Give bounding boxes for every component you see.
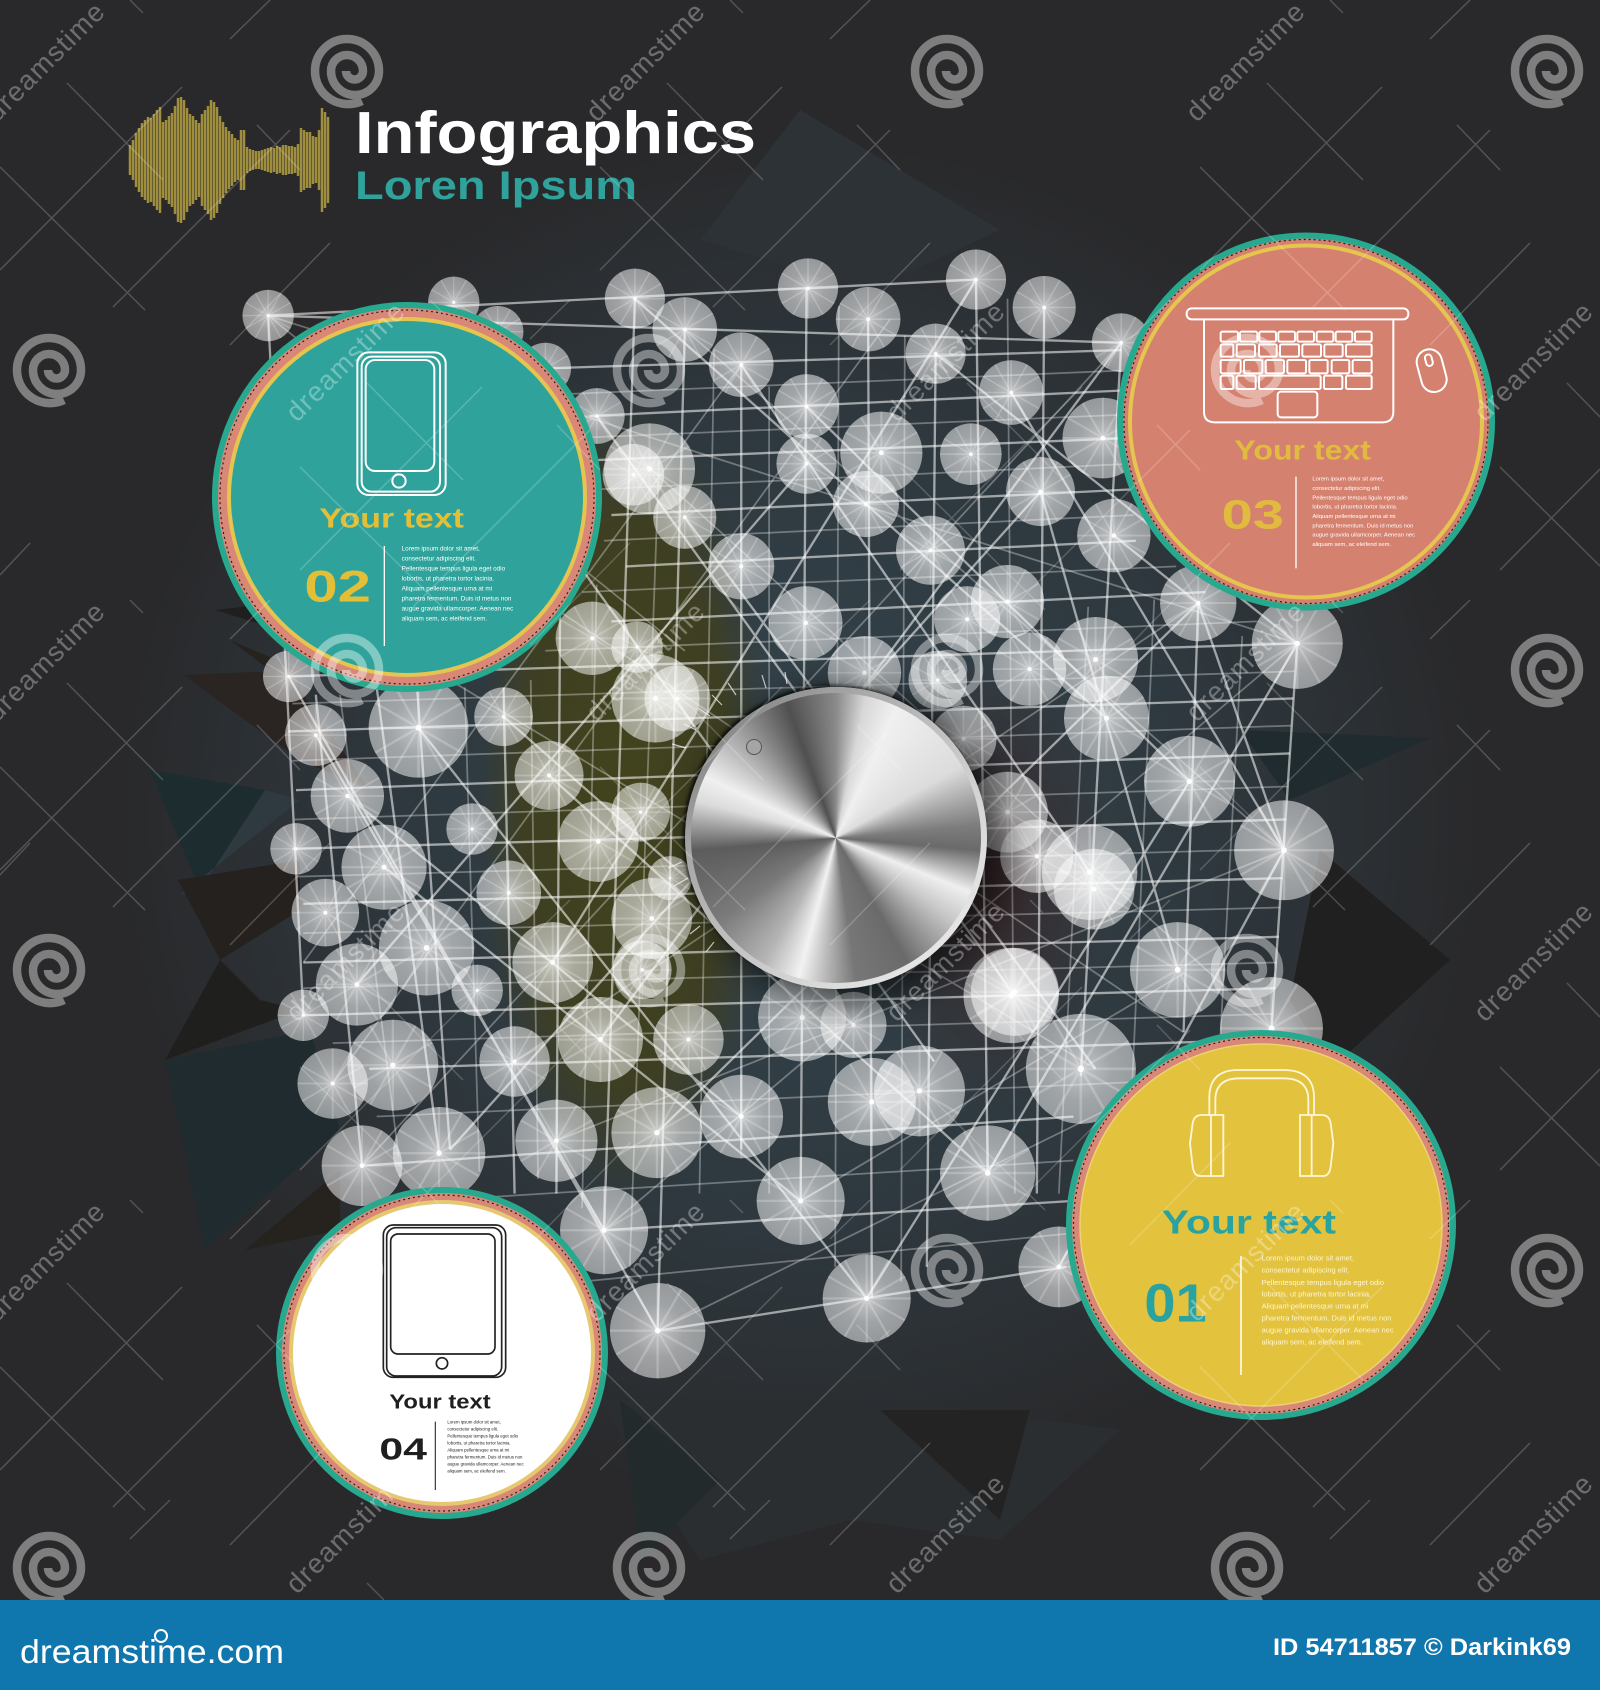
body text: pharetra fermentum. Duis id metus non	[402, 595, 512, 602]
body text: Aliquam pellentesque urna at mi	[447, 1448, 509, 1453]
body text	[402, 545, 513, 622]
watermark text: dreamstime	[879, 1467, 1011, 1599]
number: 04: 04	[379, 1432, 427, 1466]
audio waveform	[130, 97, 328, 223]
body text: pharetra fermentum. Duis id metus non	[1312, 523, 1413, 529]
watermark text: dreamstime	[279, 295, 411, 427]
knob tick marks	[668, 672, 787, 952]
body text	[447, 1420, 524, 1474]
panel: 04 white	[279, 1190, 605, 1516]
heading: your text: Your text	[389, 1391, 491, 1414]
watermark text: dreamstime	[1179, 1195, 1311, 1327]
body text: Lorem ipsum dolor sit amet,	[1262, 1254, 1354, 1263]
watermark text: dreamstime	[1467, 895, 1599, 1027]
body text	[1312, 477, 1415, 548]
metal dial knob	[685, 687, 987, 989]
body text: augue gravida ullamcorper. Aenean nec	[1312, 533, 1415, 539]
body text: lobortis, ut pharetra tortor lacinia.	[402, 575, 494, 582]
panel: 03 coral	[1120, 236, 1492, 608]
watermark text: dreamstime	[1179, 595, 1311, 727]
icon: tablet	[383, 1225, 506, 1377]
number: 02: 02	[304, 563, 371, 612]
body text	[1262, 1254, 1394, 1347]
wireframe lattice and nodes	[242, 250, 1343, 1378]
footer bar	[0, 1600, 1600, 1690]
low-poly triangles	[150, 110, 1450, 1560]
tinted interior patches	[480, 400, 1110, 1200]
body text: pharetra fermentum. Duis id metus non	[447, 1455, 523, 1460]
body text: Lorem ipsum dolor sit amet,	[1312, 477, 1385, 483]
footer logo spiral	[155, 1630, 167, 1642]
body text: consectetur adipiscing elit.	[1312, 486, 1381, 492]
number: 03: 03	[1222, 491, 1284, 537]
body text: consectetur adipiscing elit.	[1262, 1266, 1349, 1275]
watermark text: dreamstime	[279, 1467, 411, 1599]
lattice lines	[268, 280, 1297, 1331]
watermark text: dreamstime	[579, 1195, 711, 1327]
body text: lobortis, ut pharetra tortor lacinia.	[447, 1441, 511, 1446]
divider	[382, 546, 386, 646]
body text: augue gravida ullamcorper. Aenean nec	[447, 1462, 524, 1467]
body text: aliquam sem, ac eleifend sem.	[447, 1469, 506, 1474]
watermark text: dreamstime	[879, 295, 1011, 427]
footer credit: ID 54711857 © Darkink69	[1273, 1634, 1571, 1661]
body text: Pellentesque tempus ligula eget odio	[1312, 495, 1408, 501]
watermark text: dreamstime	[1467, 1467, 1599, 1599]
body text: aliquam sem, ac eleifend sem.	[1262, 1338, 1363, 1347]
body text: Lorem ipsum dolor sit amet,	[447, 1420, 501, 1425]
panel: 02 teal	[215, 305, 599, 689]
heading: your text: Your text	[1234, 434, 1371, 465]
icon: laptop and mouse	[1187, 308, 1450, 422]
divider	[1294, 477, 1298, 568]
body text: lobortis, ut pharetra tortor lacinia.	[1262, 1290, 1371, 1299]
body text: Aliquam pellentesque urna at mi	[402, 585, 492, 592]
watermark text: dreamstime	[279, 895, 411, 1027]
divider	[434, 1422, 437, 1490]
icon: phone	[357, 352, 446, 495]
body text: augue gravida ullamcorper. Aenean nec	[1262, 1326, 1394, 1335]
divider	[1239, 1256, 1243, 1375]
body text: lobortis, ut pharetra tortor lacinia.	[1312, 505, 1398, 511]
body text: Pellentesque tempus ligula eget odio	[1262, 1278, 1384, 1287]
icon: headphones	[1190, 1070, 1333, 1176]
heading: your text: Your text	[319, 502, 464, 533]
body text: Lorem ipsum dolor sit amet,	[402, 545, 480, 552]
body text: aliquam sem, ac eleifend sem.	[402, 615, 487, 622]
number: 01: 01	[1144, 1275, 1207, 1334]
body text: consectetur adipiscing elit.	[402, 555, 476, 562]
title: Infographics	[355, 100, 756, 166]
node circles	[242, 250, 1343, 1378]
watermark text: dreamstime	[879, 895, 1011, 1027]
subtitle: Loren Ipsum	[355, 164, 637, 208]
body text: aliquam sem, ac eleifend sem.	[1312, 542, 1391, 548]
footer logo text: dreamstime.com	[20, 1633, 284, 1670]
body text: Aliquam pellentesque urna at mi	[1312, 514, 1396, 520]
body text: Pellentesque tempus ligula eget odio	[447, 1434, 519, 1439]
heading: your text: Your text	[1162, 1204, 1336, 1241]
body text: consectetur adipiscing elit.	[447, 1427, 498, 1432]
watermark text: dreamstime	[579, 595, 711, 727]
secondary dense grid lines	[268, 299, 1297, 1331]
body text: Aliquam pellentesque urna at mi	[1262, 1302, 1369, 1311]
watermark text: dreamstime	[1467, 295, 1599, 427]
panel: 01 yellow	[1069, 1033, 1453, 1417]
body text: pharetra fermentum. Duis id metus non	[1262, 1314, 1391, 1323]
body text: Pellentesque tempus ligula eget odio	[402, 565, 506, 572]
body text: augue gravida ullamcorper. Aenean nec	[402, 605, 513, 612]
